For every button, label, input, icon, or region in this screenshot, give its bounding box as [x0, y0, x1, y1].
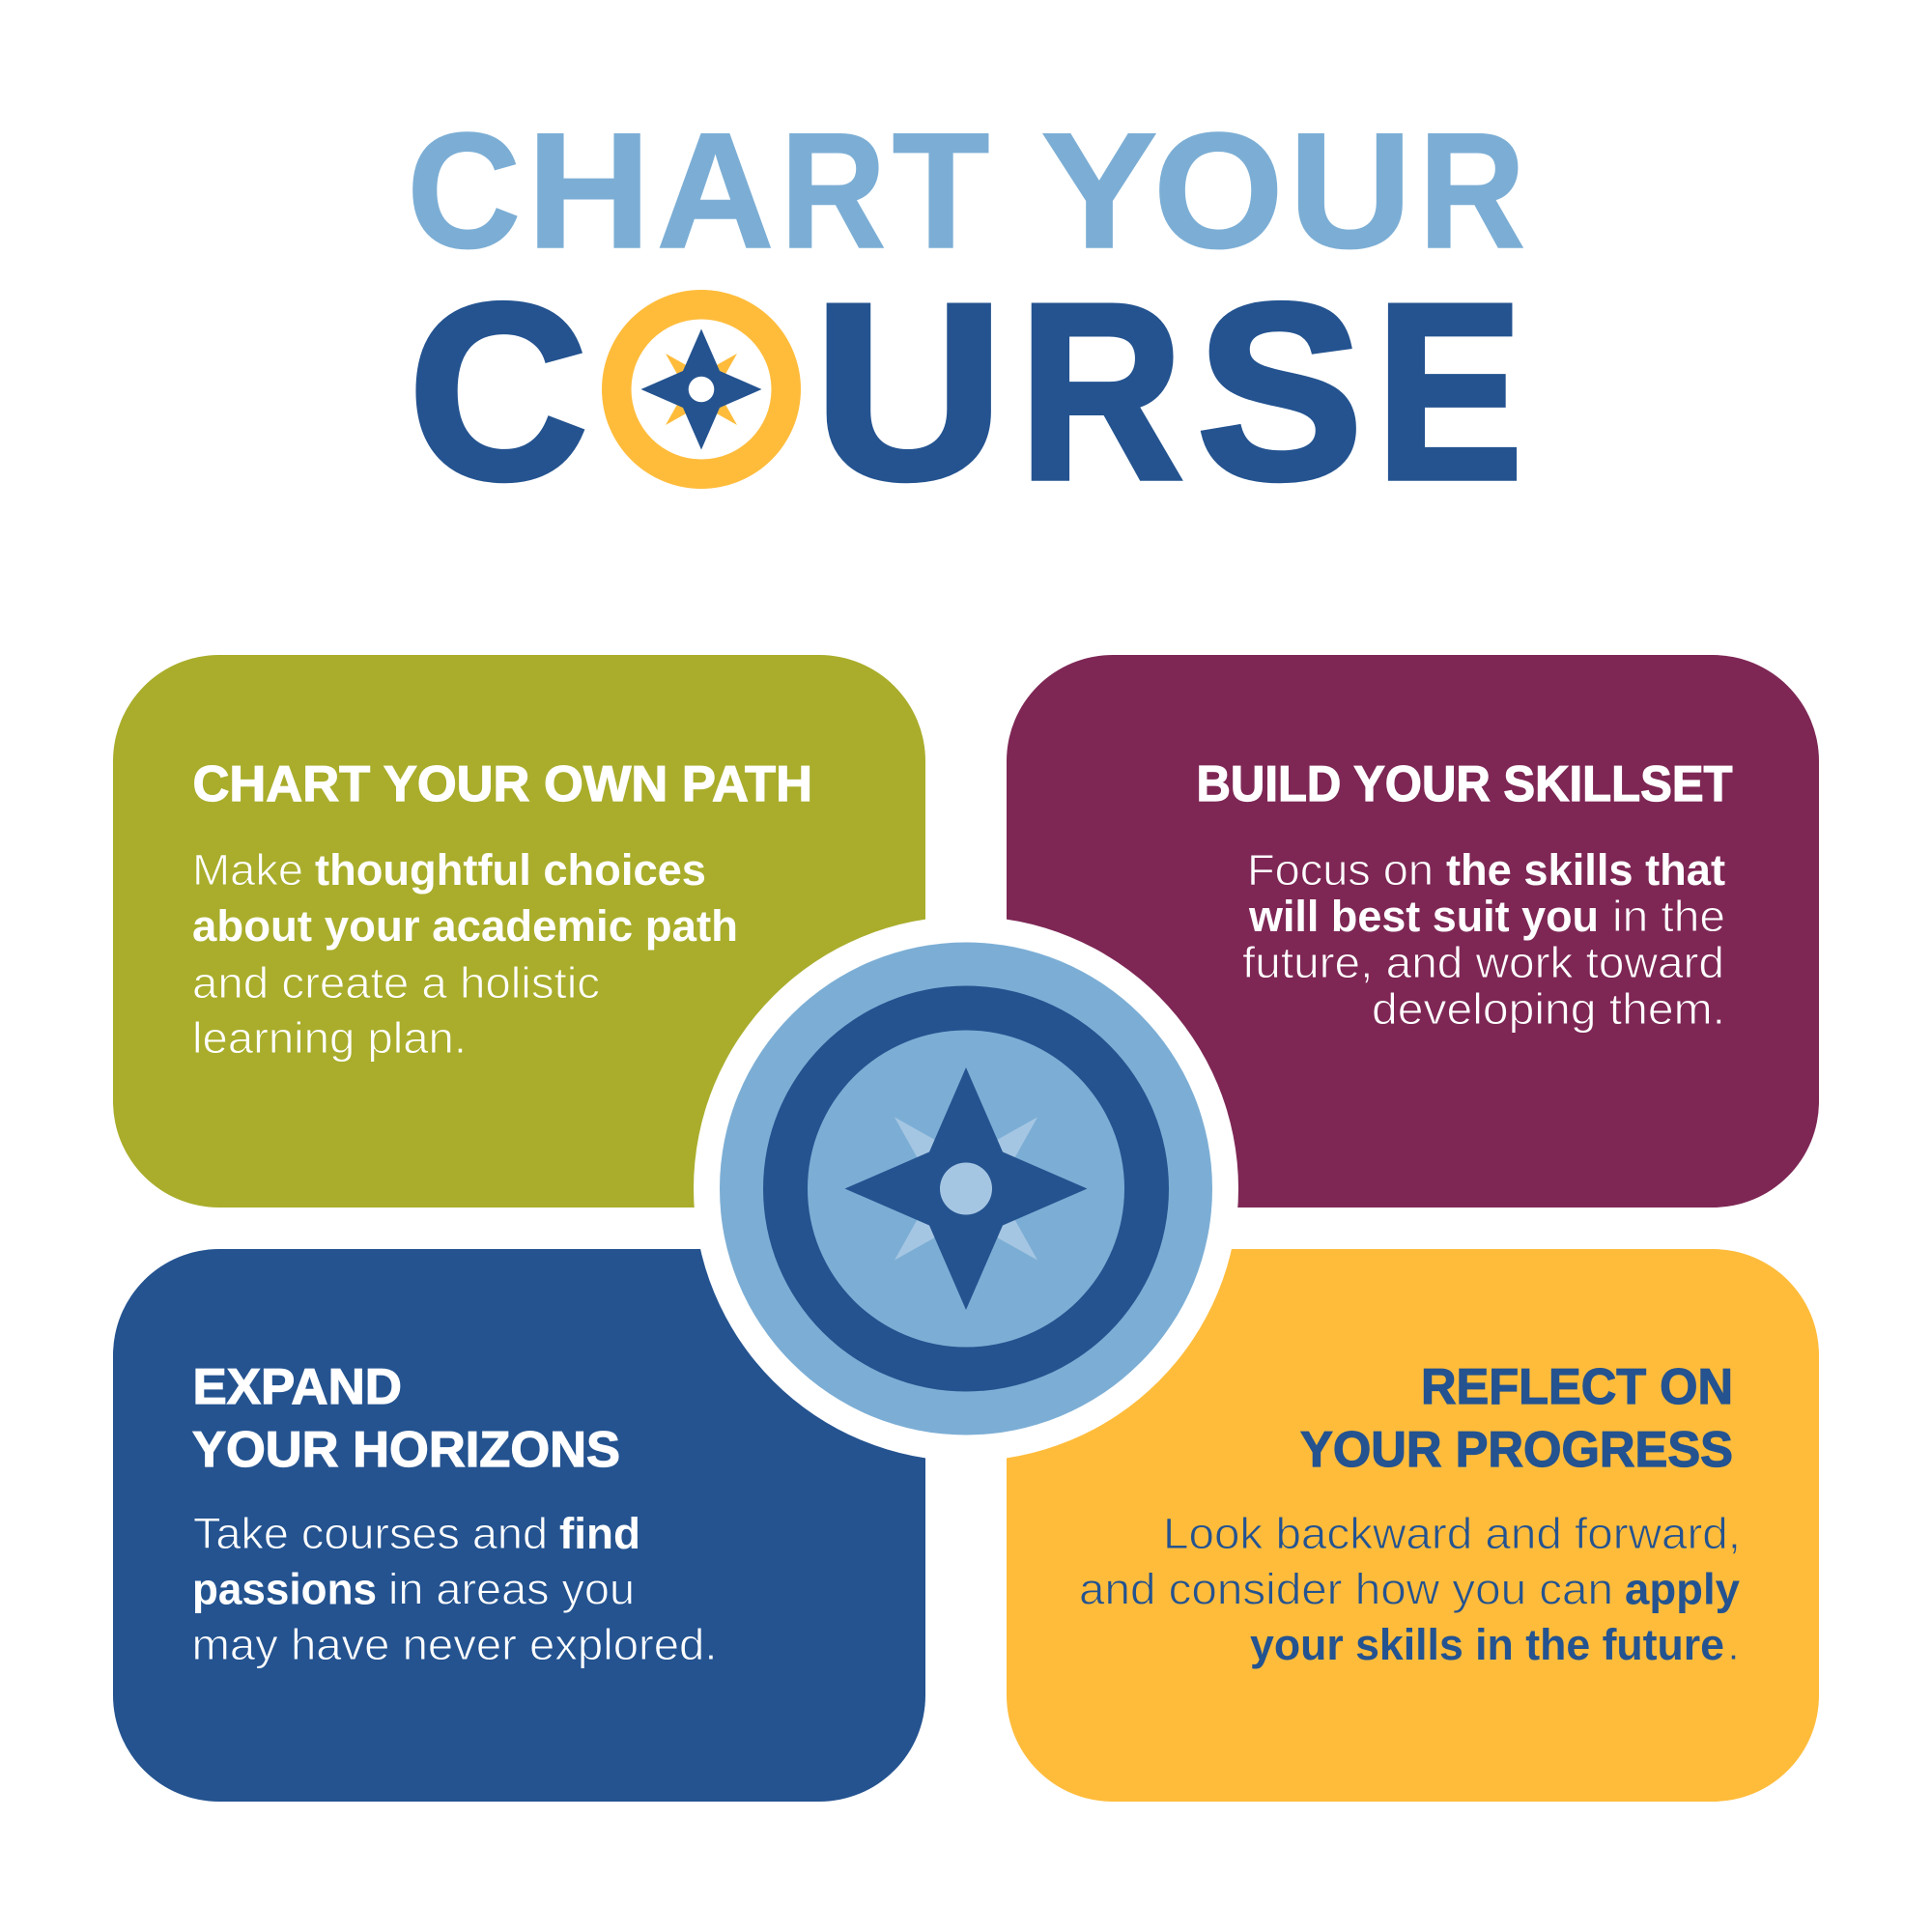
text: build your skillset body: the skills that	[1446, 845, 1725, 895]
text: chart your own path body: learning plan.	[192, 1013, 467, 1063]
icon: title compass	[602, 290, 801, 489]
panel: chart your own path background	[113, 655, 925, 1208]
title: chart your: A	[657, 99, 775, 283]
text: expand your horizons body: in areas you	[388, 1565, 635, 1613]
text: expand your horizons body: passions	[192, 1565, 377, 1613]
text: build your skillset body: in the	[1612, 892, 1725, 941]
text: chart your own path body: about your academic path	[192, 901, 738, 951]
title: course	[409, 252, 1522, 531]
text: reflect on your progress body: apply	[1625, 1565, 1740, 1613]
central compass	[694, 916, 1238, 1461]
text: expand your horizons body: find	[559, 1509, 640, 1558]
heading: expand your horizons: EXPAND	[193, 1359, 402, 1415]
heading: expand your horizons	[192, 1359, 620, 1478]
title: chart your: Y	[1040, 99, 1158, 283]
title: chart your: T	[893, 99, 989, 283]
heading: reflect on your progress: REFLECT ON	[1421, 1359, 1733, 1415]
title: chart your: U	[1289, 99, 1412, 283]
title: course: U	[813, 252, 1004, 531]
text: build your skillset body: Focus on	[1247, 845, 1434, 895]
title: chart your: R	[1419, 99, 1525, 283]
title: chart your	[407, 99, 1525, 283]
text: reflect on your progress body: .	[1727, 1620, 1740, 1669]
panel: build your skillset background	[1007, 655, 1819, 1208]
title: course: O	[638, 303, 765, 466]
text: build your skillset body	[1242, 845, 1725, 1034]
title: chart your: O	[1153, 99, 1284, 283]
title: chart your: H	[526, 99, 651, 283]
text: build your skillset body: will best suit you	[1248, 892, 1599, 941]
heading: reflect on your progress: YOUR PROGRESS	[1300, 1422, 1733, 1478]
text: reflect on your progress body: Look backward and forward,	[1163, 1509, 1741, 1558]
text: chart your own path body: thoughtful choices	[315, 845, 706, 895]
text: chart your own path body: Make	[192, 845, 303, 895]
text: chart your own path body: and create a holistic	[192, 958, 600, 1008]
title: course: E	[1376, 252, 1522, 531]
heading: reflect on your progress	[1300, 1359, 1733, 1478]
panel: expand your horizons background	[113, 1249, 925, 1802]
title: chart your: C	[407, 99, 521, 283]
heading: expand your horizons: YOUR HORIZONS	[192, 1422, 620, 1478]
heading: chart your own path: CHART YOUR OWN PATH	[193, 756, 812, 812]
title: chart your: R	[781, 99, 886, 283]
text: reflect on your progress body: and consider how you can	[1079, 1565, 1613, 1613]
text: reflect on your progress body: your skills in the future	[1250, 1620, 1724, 1669]
text: expand your horizons body: Take courses and	[193, 1509, 548, 1558]
text: build your skillset body: developing them.	[1372, 984, 1725, 1034]
text: chart your own path body	[192, 845, 738, 1063]
text: expand your horizons body: may have never explored.	[191, 1620, 717, 1669]
text: reflect on your progress body	[1079, 1509, 1741, 1669]
title: course: C	[409, 252, 587, 531]
text: expand your horizons body	[191, 1509, 717, 1669]
title: course: R	[1019, 252, 1183, 531]
text: build your skillset body: future, and work toward	[1242, 938, 1724, 987]
heading: build your skillset: BUILD YOUR SKILLSET	[1196, 756, 1733, 812]
title: course: S	[1197, 252, 1363, 531]
panel: reflect on your progress background	[1007, 1249, 1819, 1802]
